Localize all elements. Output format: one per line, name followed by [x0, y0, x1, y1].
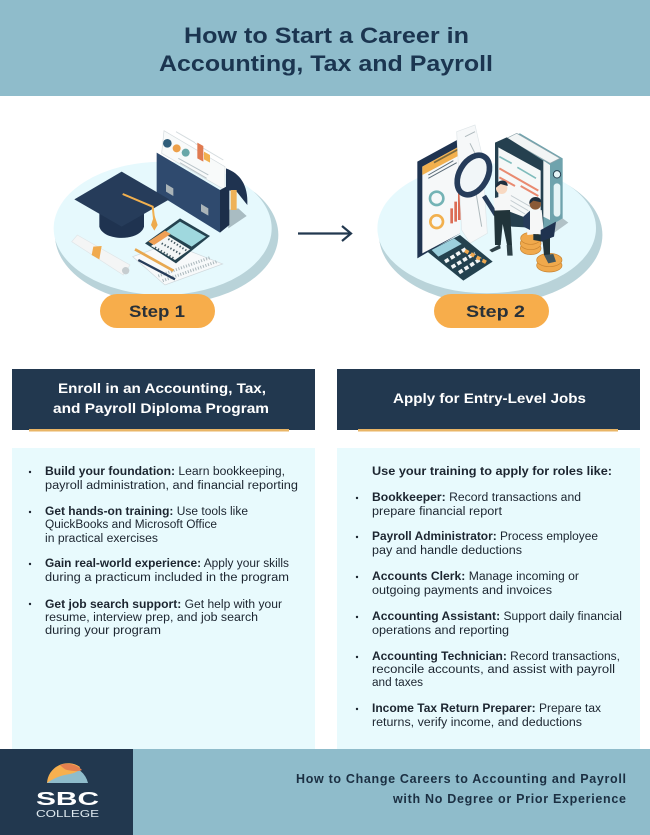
role: bookkeeper: Bookkeeper: Record transactions and [372, 492, 581, 504]
list item: real-world experience: during a practicum included in the program [45, 572, 289, 584]
disc: step 2 platform [377, 163, 602, 304]
role: accounting assistant [356, 611, 622, 637]
step 2 badge: Step 2 [466, 302, 525, 321]
footer text: How to Change Careers to Accounting and Payroll [296, 772, 626, 786]
list item: hands-on training: QuickBooks and Microsoft Office [45, 519, 217, 531]
list item: build your foundation: Build your foundation: Learn bookkeeping, [45, 466, 285, 478]
panel: step 2 details [337, 448, 640, 749]
role: accounting technician [356, 651, 620, 689]
title [159, 23, 493, 76]
role: income tax return preparer [356, 703, 601, 729]
icon: sunrise logo [47, 763, 88, 783]
role: accounting assistant: operations and reporting [372, 625, 509, 637]
role: accounts clerk: outgoing payments and invoices [372, 585, 552, 597]
logo panel: SBC College [0, 749, 133, 835]
panel: step 1 details [12, 448, 315, 749]
footer text: with No Degree or Prior Experience [392, 792, 626, 806]
step 2 badge [434, 294, 549, 328]
heading panel: step 1: and Payroll Diploma Program [53, 400, 269, 416]
footer text [296, 772, 626, 806]
role: accounting technician: reconcile accounts, and assist with payroll [372, 664, 615, 676]
list item: build your foundation [29, 466, 298, 492]
role: accounts clerk [356, 571, 579, 597]
role: payroll administrator: Payroll Administrator: Process employee [372, 531, 598, 543]
list item: job search support: during your program [45, 625, 161, 637]
role: accounts clerk: Accounts Clerk: Manage incoming or [372, 571, 579, 583]
arrow: step 1 to step 2 [298, 226, 351, 241]
title: Accounting, Tax and Payroll [159, 51, 493, 76]
role: accounting assistant: Accounting Assistant: Support daily financial [372, 611, 622, 623]
list item: real-world experience: Gain real-world experience: Apply your skills [45, 558, 289, 570]
step 1 badge [100, 294, 215, 328]
role: bookkeeper: prepare financial report [372, 506, 503, 518]
list item: real-world experience [29, 558, 289, 584]
list intro: Use your training to apply for roles like: [372, 466, 612, 478]
list item: hands-on training: in practical exercises [45, 533, 158, 545]
list item: job search support: resume, interview prep, and job search [45, 612, 258, 624]
role: payroll administrator [356, 531, 598, 557]
role: bookkeeper [356, 492, 581, 518]
list item: job search support: Get job search support: Get help with your [45, 599, 282, 611]
heading panel: step 1 [12, 369, 315, 432]
list item: hands-on training [29, 506, 248, 545]
step 1 badge: Step 1 [129, 302, 185, 321]
heading panel: step 1: Enroll in an Accounting, Tax, [58, 380, 266, 396]
role: accounting technician: and taxes [372, 677, 423, 689]
title band [0, 0, 650, 96]
logo wordmark: SBC [36, 789, 99, 809]
logo wordmark: COLLEGE [36, 809, 99, 820]
illustration: step 2 documents, calculator and people [417, 125, 568, 281]
role: accounting technician: Accounting Technician: Record transactions, [372, 651, 620, 663]
role: payroll administrator: pay and handle deductions [372, 545, 522, 557]
list item: build your foundation: payroll administration, and financial reporting [45, 480, 298, 492]
heading panel: step 2: Apply for Entry-Level Jobs [393, 390, 586, 406]
list item: job search support [29, 599, 282, 637]
role: income tax return preparer: returns, verify income, and deductions [372, 717, 582, 729]
footer band [133, 749, 650, 835]
list item: hands-on training: Get hands-on training: Use tools like [45, 506, 248, 518]
role: income tax return preparer: Income Tax Return Preparer: Prepare tax [372, 703, 601, 715]
illustration: step 1 education and accounting supplies [54, 131, 278, 304]
heading panel: step 2 [337, 369, 640, 432]
logo wordmark [36, 789, 99, 820]
title: How to Start a Career in [184, 23, 469, 48]
